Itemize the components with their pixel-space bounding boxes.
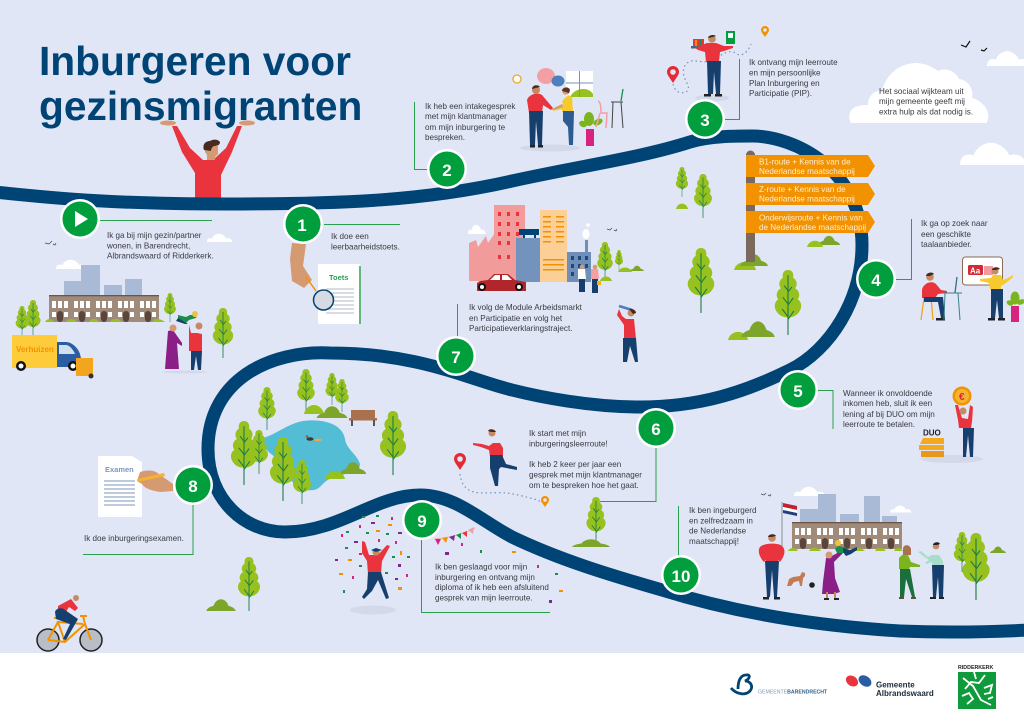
step 9: 9	[417, 512, 427, 531]
teacher in yellow	[980, 267, 1013, 320]
step 10	[661, 506, 756, 595]
whiteboard: Aa	[970, 266, 981, 276]
step 9: gesprek van mijn leerroute.	[435, 594, 533, 602]
step: start: Albrandswaard of Ridderkerk.	[107, 252, 214, 260]
step 10: 10	[672, 567, 690, 586]
step 4: taalaanbieder.	[921, 240, 972, 249]
hand with magnifier and test sheet	[290, 243, 361, 324]
exam paper and writing hand: Examen	[105, 465, 134, 474]
family with child	[163, 311, 207, 374]
step 1: Ik doe een	[331, 232, 369, 241]
clock	[513, 75, 521, 83]
woman in purple with child	[822, 540, 857, 600]
car	[477, 274, 526, 291]
signpost with route options: Nederlandse maatschappij	[759, 167, 855, 176]
step 10: Ik ben ingeburgerd	[689, 506, 756, 515]
social team cloud: mijn gemeente geeft mij	[879, 97, 965, 106]
window	[566, 71, 593, 97]
step 2: om mijn inburgering te	[425, 123, 506, 132]
person with euro coin and DUO money: DUO	[923, 428, 941, 438]
footer band	[0, 653, 1024, 724]
logo: Gemeente Albrandswaard: Gemeente	[876, 680, 915, 690]
man with hands on hips	[759, 534, 784, 600]
step 9: inburgering en ontvang mijn	[435, 573, 535, 582]
step 6	[529, 408, 676, 502]
logo: Ridderkerk	[958, 665, 996, 709]
pink chair	[596, 101, 607, 128]
step 3: Participatie (PIP).	[749, 89, 812, 98]
step 6: 6	[651, 420, 661, 439]
step 5: inkomen heb, sluit ik een	[843, 399, 932, 408]
moving van: Verhuizen	[16, 345, 54, 354]
orange map pin	[761, 26, 769, 37]
red map pin	[667, 66, 679, 83]
step 3	[685, 58, 838, 139]
step 3: en mijn persoonlijke	[749, 68, 821, 78]
Dutch flag	[782, 502, 797, 546]
step 9	[402, 500, 550, 612]
step 2: met mijn klantmanager	[425, 112, 507, 121]
confetti pieces	[335, 515, 563, 603]
logo: Ridderkerk: RIDDERKERK	[958, 665, 993, 671]
step 1: leerbaarheidstoets.	[331, 242, 400, 252]
person with learning route	[667, 26, 769, 102]
step 2	[414, 102, 516, 189]
step 5: Wanneer ik onvoldoende	[843, 389, 933, 398]
person with telescope	[617, 306, 638, 362]
person with euro coin and DUO money	[919, 386, 983, 463]
step 10: en zelfredzaam in	[689, 516, 753, 526]
ball	[809, 582, 815, 588]
hand with magnifier and test sheet: Toets	[329, 273, 348, 282]
step 4	[856, 219, 988, 299]
winding road	[0, 136, 1024, 632]
step 6: om te bespreken hoe het gaat.	[529, 481, 639, 490]
ducks	[306, 435, 322, 441]
man with glasses	[918, 542, 944, 599]
title	[39, 38, 362, 129]
social team cloud	[849, 63, 988, 123]
step 5	[778, 370, 935, 429]
bench	[349, 410, 377, 426]
two people talking	[578, 265, 601, 293]
step 4: Ik ga op zoek naar	[921, 219, 988, 228]
lake	[262, 420, 360, 490]
step 6: Ik start met mijn	[529, 429, 586, 438]
step 8: Ik doe inburgeringsexamen.	[84, 534, 184, 543]
logo: Gemeente Barendrecht	[731, 675, 828, 696]
graduate with confetti	[335, 515, 563, 614]
step: start: Ik ga bij mijn gezin/partner	[107, 231, 202, 240]
step 7: en Participatie en volg het	[469, 314, 563, 323]
step 1	[283, 204, 400, 252]
potted plant	[1006, 292, 1024, 322]
step 3: 3	[700, 111, 710, 130]
step 10: maatschappij!	[689, 537, 739, 546]
signpost with route options	[746, 150, 875, 262]
green PIP booklet	[726, 31, 735, 44]
clouds and birds	[45, 41, 1024, 512]
step 4: 4	[871, 271, 881, 290]
step 3: Ik ontvang mijn leerroute	[749, 58, 838, 67]
runner with route to orange pin	[454, 429, 549, 507]
signpost with route options: Z-route + Kennis van de	[759, 185, 846, 194]
signpost with route options: B1-route + Kennis van de	[759, 158, 851, 166]
woman with hijab	[899, 545, 920, 599]
step: start: wonen, in Barendrecht,	[106, 242, 190, 250]
cyclist	[37, 595, 102, 651]
logo: Gemeente Barendrecht: GEMEENTEBARENDRECHT	[758, 690, 828, 696]
title: gezinsmigranten	[39, 83, 362, 129]
man in red	[695, 35, 733, 96]
person holding up the title	[160, 120, 255, 198]
dog	[787, 572, 805, 586]
student at desk	[921, 273, 962, 320]
step 5: 5	[793, 382, 803, 401]
title: Inburgeren voor	[39, 38, 351, 84]
stack of books	[691, 39, 705, 48]
step 6: inburgeringsleerroute!	[529, 440, 608, 448]
exam paper and writing hand	[98, 456, 173, 517]
step 9: Ik ben geslaagd voor mijn	[435, 562, 527, 572]
standing desk with laptop	[611, 89, 623, 128]
step 2: Ik heb een intakegesprek	[425, 102, 516, 111]
step 1: 1	[297, 216, 307, 235]
step 5: leerroute te betalen.	[843, 420, 915, 429]
step 6: Ik heb 2 keer per jaar een	[529, 460, 621, 469]
step 4: een geschikte	[921, 230, 971, 239]
speech bubbles	[537, 68, 564, 86]
bunting	[434, 527, 475, 545]
step 7: Participatieverklaringstraject.	[469, 324, 572, 333]
step 10: de Nederlandse	[689, 526, 747, 536]
woman in yellow shaking hands	[552, 87, 574, 145]
moving van	[12, 335, 94, 378]
step 8: 8	[188, 477, 198, 496]
potted plant	[578, 112, 604, 146]
signpost with route options: Nederlandse maatschappij	[759, 194, 855, 204]
step 2: 2	[442, 161, 452, 180]
step: start	[60, 199, 214, 260]
graduate	[362, 541, 390, 599]
park with lake, trees and bench	[231, 369, 406, 504]
trees and bushes across the map	[16, 167, 1006, 611]
signpost with route options: de Nederlandse maatschappij	[759, 223, 866, 232]
step 8	[83, 465, 213, 554]
step 9: diploma of ik heb een afsluitend	[435, 583, 549, 592]
social team cloud: Het sociaal wijkteam uit	[879, 87, 964, 96]
step 7: 7	[451, 348, 461, 367]
step 3: Plan Inburgering en	[749, 79, 820, 88]
park trees	[231, 369, 406, 504]
step 7: Ik volg de Module Arbeidsmarkt	[469, 303, 583, 312]
step 6: gesprek met mijn klantmanager	[529, 470, 642, 480]
step 5: lening af bij DUO om mijn	[843, 410, 935, 419]
factory city scene	[469, 205, 601, 293]
final scene: houses, flag and community	[759, 494, 944, 600]
social team cloud: extra hulp als dat nodig is.	[879, 108, 973, 116]
moving scene: houses, van and family	[12, 265, 207, 378]
person at desk and language teacher	[921, 257, 1024, 322]
man in red shaking hands	[527, 85, 553, 148]
step 2: bespreken.	[425, 133, 465, 142]
handshake scene	[513, 68, 623, 152]
person with euro coin and DUO money: €	[959, 392, 965, 403]
logo: Gemeente Albrandswaard	[844, 673, 934, 698]
signpost with route options: Onderwijsroute + Kennis van	[759, 214, 863, 222]
logo: Gemeente Albrandswaard: Albrandswaard	[876, 689, 934, 698]
step 7	[436, 303, 583, 376]
